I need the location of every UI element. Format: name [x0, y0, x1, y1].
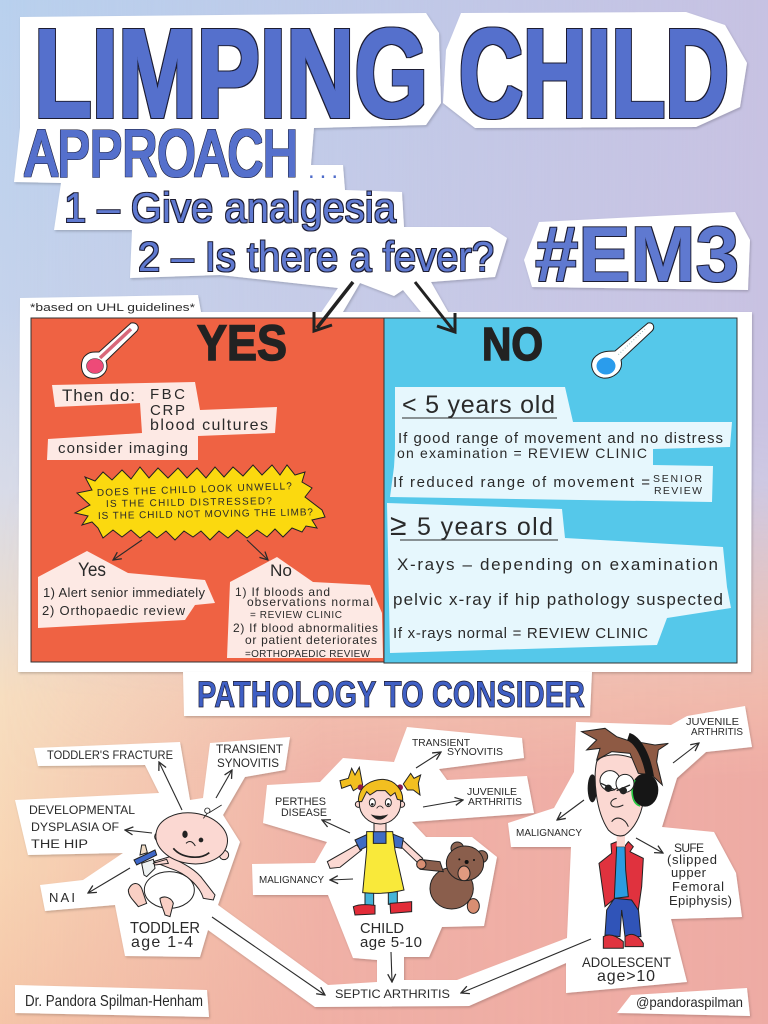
illustration: toddler	[128, 805, 231, 917]
paper: yes actions: 2) Orthopaedic review	[42, 603, 186, 618]
heading: YES: YES	[197, 315, 287, 371]
label: SUFE: upper	[671, 865, 707, 880]
label: SUFE: Epiphysis)	[669, 893, 732, 908]
heading: NO: NO	[482, 318, 543, 370]
paper: no actions	[227, 557, 383, 660]
label: septic arthritis: SEPTIC ARTHRITIS	[335, 987, 450, 1001]
ellipsis: ...	[308, 157, 338, 184]
arrow: to yes	[113, 540, 142, 560]
label: SUFE: Femoral	[672, 879, 724, 894]
step one: 1 – Give analgesia	[64, 184, 397, 231]
heading: pathology to consider: PATHOLOGY TO CONSIDER	[197, 674, 585, 715]
arrow: to no	[247, 540, 268, 560]
label: developmental dysplasia: DEVELOPMENTAL	[29, 805, 136, 817]
arrows: toddler	[88, 762, 325, 995]
label: juvenile arthritis: ARTHRITIS	[691, 726, 743, 738]
label: juvenile arthritis: JUVENILE	[467, 786, 517, 798]
heading: LIMPING: LIMPING	[34, 3, 428, 144]
callout: warning burst	[75, 465, 325, 540]
arrow: fever to no	[415, 282, 455, 332]
label: adolescent age: age>10	[597, 968, 655, 985]
label: transient synovitis: TRANSIENT	[216, 744, 283, 756]
label: NAI: NAI	[49, 890, 75, 905]
social handle: @pandoraspilman	[636, 994, 743, 1010]
label: transient synovitis	[216, 744, 283, 770]
paper: then do: blood cultures	[150, 417, 268, 434]
paper: child word	[443, 12, 747, 128]
label: toddler age: age 1-4	[131, 934, 193, 951]
paper: over five: pelvic x-ray if hip pathology suspected	[393, 590, 723, 609]
label: perthes disease	[275, 796, 327, 819]
paper: under five: SENIOR	[653, 473, 702, 485]
label: developmental dysplasia	[29, 805, 136, 851]
icon: cold thermometer	[592, 323, 654, 378]
paper: under five: on examination = REVIEW CLINIC	[397, 445, 647, 461]
hashtag EM3: #EM3	[535, 210, 739, 298]
illustration: teddy bear	[417, 842, 488, 913]
paper: then do	[47, 382, 277, 460]
paper: no actions: 1) If bloods and	[235, 585, 330, 599]
paper: over five: ≥	[390, 509, 406, 542]
label: toddler age	[130, 920, 200, 951]
label: juvenile arthritis: ARTHRITIS	[468, 796, 522, 808]
group: adolescent	[461, 716, 743, 993]
callout: warning burst: IS THE CHILD NOT MOVING THE LIMB?	[98, 507, 313, 522]
paper: under five	[390, 387, 732, 502]
author credit: Dr. Pandora Spilman-Henham	[25, 993, 203, 1010]
paper: then do: FBC	[150, 386, 185, 403]
paper: under five: REVIEW	[654, 485, 702, 497]
paper: title and steps	[14, 13, 507, 317]
paper: under five: < 5 years old	[402, 391, 555, 419]
paper: over five: X-rays – depending on examination	[397, 555, 718, 574]
label: juvenile arthritis	[686, 716, 743, 738]
paper: handle	[617, 988, 750, 1016]
paper: no actions: = REVIEW CLINIC	[250, 610, 342, 621]
illustration: adolescent	[582, 728, 668, 948]
label: child age	[360, 920, 422, 951]
paper: then do: consider imaging	[58, 440, 188, 457]
label: developmental dysplasia: THE HIP	[31, 839, 88, 851]
paper: yes actions: 1) Alert senior immediately	[43, 585, 206, 600]
label: adolescent age	[582, 954, 671, 985]
icon: hot thermometer	[82, 323, 138, 378]
paper: over five: If x-rays normal = REVIEW CLINIC	[393, 625, 648, 642]
paper: yes actions	[38, 551, 215, 628]
step two: 2 – Is there a fever?	[138, 233, 494, 280]
callout: warning burst: DOES THE CHILD LOOK UNWELL?	[97, 481, 292, 499]
illustration: child	[327, 767, 423, 915]
label: toddler's fracture: TODDLER'S FRACTURE	[47, 750, 173, 762]
label: malignancy: MALIGNANCY	[516, 827, 582, 839]
label: juvenile arthritis: JUVENILE	[686, 716, 739, 728]
label: SUFE: SUFE	[674, 841, 704, 855]
label: malignancy: MALIGNANCY	[259, 875, 324, 886]
paper: no actions: No	[270, 561, 292, 580]
label: toddler age: TODDLER	[130, 920, 200, 937]
label: child age: age 5-10	[360, 934, 422, 951]
arrows: adolescent	[461, 743, 699, 993]
arrows: child	[322, 752, 463, 982]
group: child	[259, 737, 522, 982]
label: SUFE	[667, 841, 732, 908]
paper: no actions: 2) If blood abnormalities	[233, 621, 378, 635]
paper: then do: Then do:	[62, 386, 135, 405]
label: child age: CHILD	[360, 920, 404, 937]
paper: over five	[387, 503, 731, 653]
label: juvenile arthritis	[467, 786, 522, 808]
paper: under five: If good range of movement and no distress	[398, 430, 723, 447]
group: toddler	[29, 744, 325, 995]
paper: under five: If reduced range of movement =	[393, 474, 650, 491]
label: transient synovitis	[412, 737, 503, 758]
paper: over five: 5 years old	[417, 513, 553, 541]
arrow: fever to yes	[314, 282, 353, 331]
paper: author	[15, 985, 209, 1017]
paper: yes actions: Yes	[78, 560, 106, 581]
paper: no actions: observations normal	[247, 595, 373, 609]
panel: no	[384, 318, 737, 663]
label: perthes disease: PERTHES	[275, 796, 326, 808]
label: transient synovitis: TRANSIENT	[412, 737, 471, 749]
paper: no actions: =ORTHOPAEDIC REVIEW	[245, 649, 371, 660]
label: adolescent age: ADOLESCENT	[582, 954, 671, 970]
label: developmental dysplasia: DYSPLASIA OF	[31, 822, 119, 834]
paper: no actions: or patient deteriorates	[245, 633, 377, 647]
heading: APPROACH: APPROACH	[25, 116, 298, 190]
label: SUFE: (slipped	[667, 852, 717, 867]
label: transient synovitis: SYNOVITIS	[217, 758, 279, 770]
guidelines tab and panel paper: *based on UHL guidelines*	[30, 302, 196, 314]
label: transient synovitis: SYNOVITIS	[447, 746, 503, 758]
label: perthes disease: DISEASE	[281, 807, 327, 819]
paper: pathology cutouts	[15, 706, 752, 1017]
paper: then do: CRP	[150, 402, 185, 419]
callout: warning burst: IS THE CHILD DISTRESSED?	[106, 496, 272, 510]
panel: yes	[31, 315, 384, 662]
title block: limping child approach	[14, 3, 747, 317]
